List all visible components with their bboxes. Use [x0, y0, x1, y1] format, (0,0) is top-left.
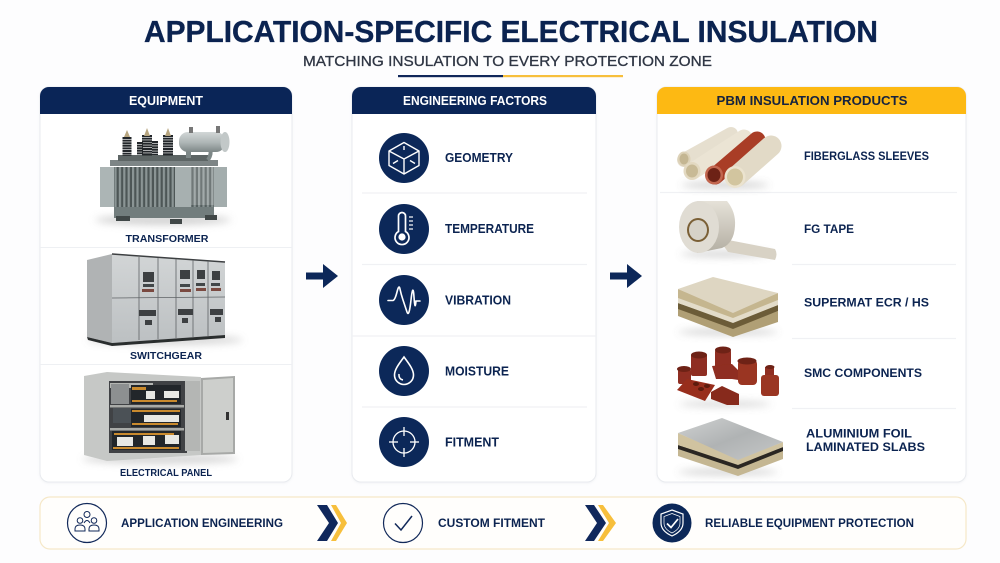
- arrow: equipment to factors: [306, 264, 338, 288]
- subtitle: MATCHING INSULATION TO EVERY PROTECTION ZONE: [303, 53, 712, 70]
- chevrons 2: [585, 505, 616, 541]
- chevrons 1: [317, 505, 347, 541]
- label: aluminium foil laminated slabs: LAMINATED SLABS: [806, 440, 925, 454]
- title: APPLICATION-SPECIFIC ELECTRICAL INSULATION: [144, 15, 878, 49]
- icon: reliable protection shield: [652, 504, 692, 542]
- image: supermat slabs: [678, 277, 778, 337]
- icon: fitment target: [379, 417, 429, 467]
- image: aluminium foil slabs: [678, 418, 783, 476]
- image: electrical panel: [82, 372, 238, 464]
- label: fg tape: FG TAPE: [804, 222, 854, 236]
- heading: engineering factors: ENGINEERING FACTORS: [403, 94, 547, 108]
- heading: equipment: EQUIPMENT: [129, 94, 203, 108]
- panel: equipment: [40, 87, 292, 482]
- panel: engineering factors: [352, 87, 596, 482]
- label: fiberglass sleeves: FIBERGLASS SLEEVES: [804, 149, 929, 163]
- icon: application engineering people: [68, 504, 106, 542]
- label: fitment: FITMENT: [445, 436, 499, 450]
- label: moisture: MOISTURE: [445, 364, 509, 378]
- panel: PBM insulation products: [657, 87, 966, 482]
- image: SMC components: [677, 346, 779, 407]
- label: temperature: TEMPERATURE: [445, 222, 534, 236]
- label: switchgear: SWITCHGEAR: [130, 350, 202, 362]
- icon: moisture drop: [379, 346, 429, 396]
- image: switchgear: [87, 254, 243, 346]
- icon: geometry cube: [379, 133, 429, 183]
- image: fg tape: [679, 201, 776, 260]
- icon: custom fitment check: [384, 504, 422, 542]
- label: SMC components: SMC COMPONENTS: [804, 366, 922, 380]
- label: geometry: GEOMETRY: [445, 151, 514, 165]
- image: fiberglass sleeves: [678, 134, 771, 188]
- heading: products: PBM INSULATION PRODUCTS: [716, 94, 908, 108]
- label: reliable equipment protection: RELIABLE EQUIPMENT PROTECTION: [705, 516, 914, 530]
- label: transformer: TRANSFORMER: [126, 233, 209, 245]
- label: electrical panel: ELECTRICAL PANEL: [120, 467, 213, 479]
- bushings: [127, 135, 168, 156]
- label: supermat: SUPERMAT ECR / HS: [804, 296, 929, 310]
- label: custom fitment: CUSTOM FITMENT: [438, 516, 546, 530]
- image: transformer: [95, 126, 231, 225]
- icon: thermometer: [379, 204, 429, 254]
- label: vibration: VIBRATION: [445, 294, 511, 308]
- icon: vibration wave: [379, 275, 429, 325]
- arrow: factors to products: [610, 264, 642, 288]
- label: aluminium foil laminated slabs: ALUMINIUM FOIL: [806, 426, 912, 440]
- process bar: [40, 497, 966, 549]
- label: application engineering: APPLICATION ENGINEERING: [121, 516, 283, 530]
- title underline: [398, 75, 623, 77]
- label: aluminium foil laminated slabs: [806, 426, 925, 454]
